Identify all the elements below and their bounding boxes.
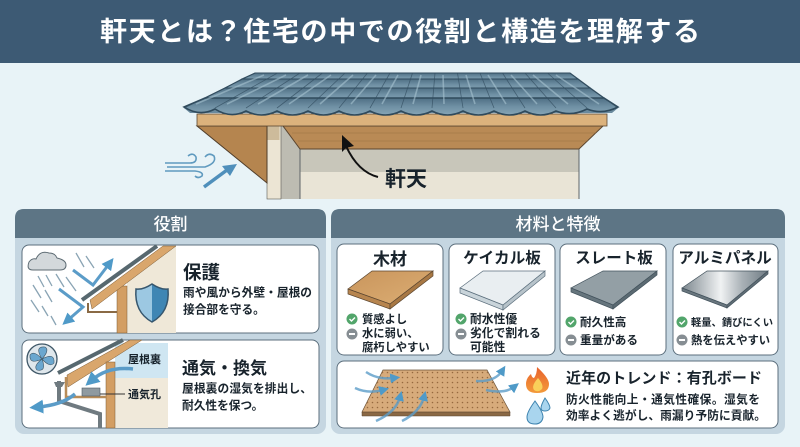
gutter and downpipe — [59, 381, 100, 428]
aluminium pros and cons — [676, 316, 773, 347]
ventilation description: 耐久性を保つ。 — [182, 398, 263, 412]
materials header: 材料と特徴 — [516, 215, 600, 234]
shield icon — [136, 284, 168, 322]
protection illustration — [28, 246, 176, 333]
trend description — [566, 392, 766, 422]
ventilation description: 屋根裏の湿気を排出し、 — [182, 382, 312, 396]
tiled roof — [184, 73, 618, 115]
panel: roles — [15, 209, 326, 434]
calcium silicate pros and cons: 耐水性優 — [470, 312, 517, 326]
arrow to soffit — [342, 135, 378, 177]
eaves illustration — [165, 73, 618, 199]
card: calcium silicate board: ケイカル板 — [463, 249, 541, 267]
slate pros and cons: 重量がある — [580, 333, 638, 347]
calcium silicate pros and cons: 劣化で割れる — [470, 326, 541, 340]
roles header — [15, 209, 326, 238]
protection description: 雨や風から外壁・屋根の — [183, 286, 312, 300]
ventilation illustration — [27, 340, 168, 428]
trend description: 効率よく逃がし、雨漏り予防に貢献。 — [566, 408, 766, 422]
aluminium pros and cons: 熱を伝えやすい — [691, 333, 770, 347]
airflow arrows through board — [355, 371, 514, 421]
ventilation heading: 通気・換気 — [182, 359, 267, 378]
ventilation description — [182, 382, 312, 412]
card: aluminium panel — [673, 244, 778, 355]
wind arrows — [73, 264, 109, 285]
wood board — [348, 271, 433, 309]
slate pros and cons — [566, 315, 638, 347]
card: perforated board trend — [337, 361, 778, 428]
fascia board — [197, 114, 607, 126]
protection heading: 保護 — [183, 262, 221, 283]
icon: flame — [526, 367, 549, 393]
card: wood: 木材 — [373, 250, 407, 269]
card: calcium silicate board — [449, 244, 555, 355]
left soffit — [197, 126, 267, 183]
soffit underside — [283, 126, 603, 149]
calcium silicate board — [460, 271, 545, 310]
wood pros and cons: 質感よし — [362, 312, 407, 326]
slate pros and cons: 耐久性高 — [580, 315, 626, 329]
slate board — [571, 271, 657, 309]
materials header — [331, 209, 785, 238]
attic label: 屋根裏 — [128, 352, 161, 366]
card: slate board: スレート板 — [575, 249, 653, 267]
airflow arrows — [92, 368, 133, 380]
card: wood — [337, 244, 443, 355]
aluminium panel board — [682, 271, 768, 308]
wind arrow — [204, 164, 237, 187]
trend description: 防火性能向上・通気性確保。湿気を — [566, 392, 760, 406]
fan icon — [27, 344, 57, 374]
icon: water drops — [527, 398, 550, 424]
trend heading: 近年のトレンド：有孔ボード — [566, 369, 762, 387]
wind icon — [165, 154, 215, 178]
protection description: 接合部を守る。 — [183, 302, 265, 316]
wood pros and cons: 腐朽しやすい — [362, 340, 430, 354]
calcium silicate pros and cons — [456, 312, 541, 354]
rain — [31, 253, 94, 325]
wood pros and cons: 水に弱い、 — [362, 326, 418, 340]
title banner — [0, 0, 800, 63]
perforated board illustration — [362, 370, 510, 416]
protection description — [183, 286, 312, 316]
roles header: 役割 — [154, 215, 188, 234]
cloud icon — [28, 252, 66, 270]
vent label: 通気孔 — [128, 387, 161, 401]
card: protection — [22, 245, 319, 333]
aluminium pros and cons: 軽量、錆びにくい — [691, 316, 773, 329]
title banner: 軒天とは？住宅の中での役割と構造を理解する — [100, 17, 700, 47]
card: slate board — [560, 244, 666, 355]
card: ventilation — [22, 340, 319, 428]
wood pros and cons — [346, 312, 430, 354]
soffit label: 軒天 — [385, 168, 427, 191]
calcium silicate pros and cons: 可能性 — [470, 340, 506, 354]
wall and post — [267, 125, 579, 199]
card: aluminium panel: アルミパネル — [678, 249, 772, 267]
panel: materials — [331, 209, 785, 434]
